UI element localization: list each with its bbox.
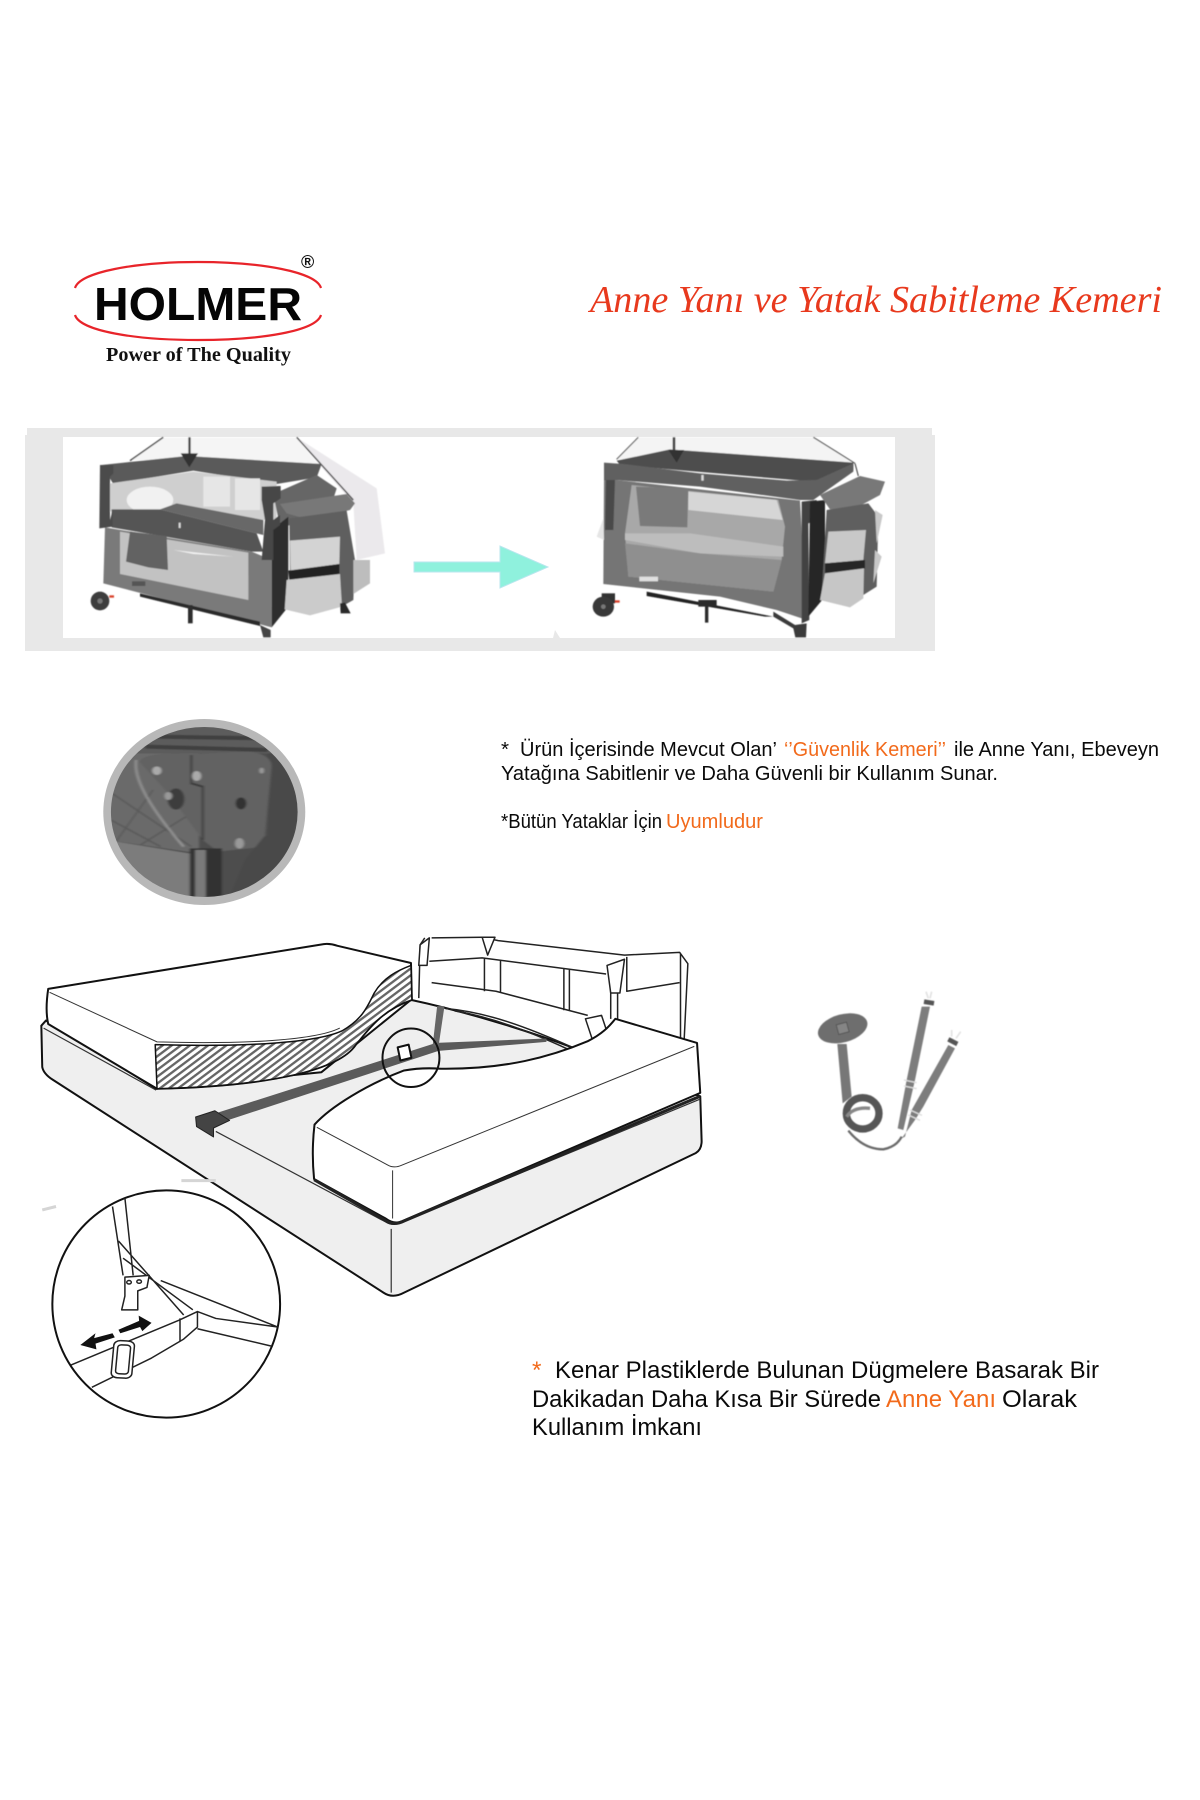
base seam shadow — [314, 1096, 700, 1224]
mattress piping — [50, 992, 340, 1043]
panel inner white area — [63, 437, 895, 638]
right mattress — [313, 1019, 700, 1222]
bed side rail — [419, 937, 688, 1049]
photo: fixing plate detail in circle — [103, 719, 305, 905]
rail note line 3: Kullanım İmkanı — [532, 1414, 702, 1441]
note line 1: * — [501, 738, 509, 761]
photo ring — [103, 719, 305, 905]
logo: HOLMER — [75, 252, 321, 366]
box spring base — [41, 1000, 702, 1296]
rail note line 1: * — [532, 1357, 542, 1384]
rail note line 2: Dakikadan Daha Kısa Bir Sürede — [532, 1386, 881, 1413]
panel: crib conversion — [25, 428, 935, 651]
illustration: bed with belt — [41, 937, 702, 1418]
title: Anne Yanı ve Yatak Sabitleme Kemeri — [587, 279, 1162, 321]
text block: safety belt note — [501, 738, 1159, 833]
logo: HOLMER: HOLMER — [94, 278, 302, 330]
note line 1: ‘’Güvenlik Kemeri’’ — [784, 738, 946, 761]
base edge lines — [44, 1028, 700, 1293]
note line 1: ile Anne Yanı, Ebeveyn — [954, 738, 1159, 761]
rail note line 2: Anne Yanı — [886, 1386, 996, 1413]
logo: HOLMER: ® — [301, 252, 314, 272]
focus circle — [382, 1028, 439, 1087]
crib: standalone mode — [593, 437, 885, 637]
stray marks — [42, 1181, 216, 1210]
belt — [196, 1006, 546, 1137]
rail note line 2: Olarak — [1002, 1386, 1078, 1413]
crib: co-sleeping mode — [91, 437, 385, 637]
left mattress — [47, 944, 412, 1089]
note line 2: Yatağına Sabitlenir ve Daha Güvenli bir Kullanım Sunar. — [501, 762, 998, 785]
product: safety belt accessory — [815, 992, 961, 1149]
belt pad — [815, 1008, 871, 1048]
belt straps — [837, 1044, 852, 1103]
photo content — [107, 725, 302, 898]
note line 3: Uyumludur — [666, 810, 763, 833]
detail circle — [52, 1190, 280, 1418]
panel frame — [25, 428, 935, 651]
note line 3: *Bütün Yataklar İçin — [501, 810, 662, 833]
right mattress edges — [317, 1046, 694, 1219]
rail note line 1: Kenar Plastiklerde Bulunan Dügmelere Basarak Bir — [555, 1357, 1099, 1384]
text block: side rail note — [532, 1357, 1099, 1441]
note line 1: Ürün İçerisinde Mevcut Olan’ — [520, 738, 777, 761]
left mattress hatched cut — [155, 965, 412, 1089]
arrow — [414, 546, 548, 588]
logo: HOLMER: Power of The Quality — [106, 344, 291, 366]
